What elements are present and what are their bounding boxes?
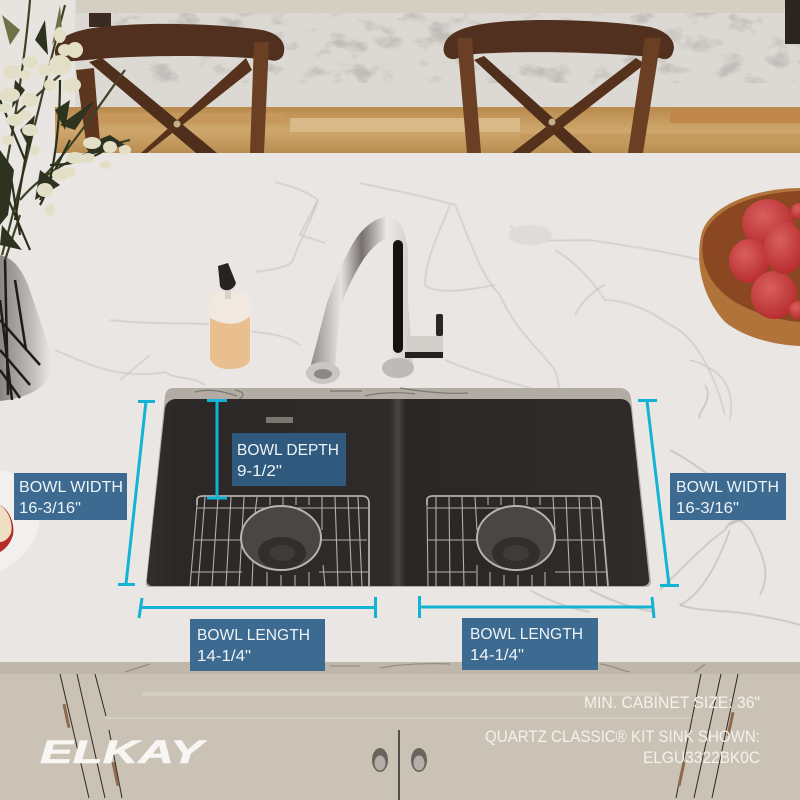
left strainer — [241, 506, 321, 570]
overflow slot — [266, 417, 293, 423]
plant flowers — [0, 27, 131, 216]
bench legs — [89, 0, 800, 44]
faucet — [306, 217, 443, 384]
plate with apple — [0, 470, 40, 572]
chair left — [55, 24, 284, 153]
label: bowl depth: 9-1/2" — [237, 463, 282, 480]
rim veining — [195, 388, 468, 399]
label: left bowl length — [190, 619, 325, 671]
sink — [146, 388, 651, 587]
cabinet drawer panel — [105, 694, 695, 718]
plant leaves — [0, 5, 125, 250]
knob right — [411, 748, 427, 772]
marble grey blotch — [508, 225, 552, 245]
right grate — [427, 496, 608, 586]
dimension: bowl depth — [207, 400, 227, 498]
label: right bowl length: 14-1/4" — [470, 647, 524, 664]
dimension: right bowl width — [638, 400, 679, 586]
dimension: left bowl width — [118, 401, 155, 584]
text: minimum cabinet size: MIN. CABINET SIZE: 36" — [584, 693, 760, 712]
knob left — [372, 748, 388, 772]
fruit bowl — [699, 188, 800, 346]
background: rug — [0, 0, 800, 108]
label: right bowl width — [670, 473, 786, 520]
label: left bowl width — [14, 473, 127, 520]
dimension: left bowl length — [139, 597, 376, 618]
label: bowl depth — [232, 433, 346, 486]
text: kit sink shown: QUARTZ CLASSIC® KIT SINK SHOWN: — [485, 727, 760, 746]
label: bowl depth: BOWL DEPTH — [237, 442, 339, 459]
wood floor — [55, 107, 800, 154]
countertop — [0, 153, 800, 663]
text: model number: ELGU3322BK0C — [643, 748, 760, 767]
soap dispenser — [209, 263, 251, 369]
vase — [0, 255, 52, 401]
apples — [729, 199, 800, 319]
plant — [0, 0, 131, 260]
bench — [76, 0, 786, 13]
label: left bowl width: BOWL WIDTH — [19, 479, 123, 496]
marble veins lower right — [530, 385, 800, 625]
label: left bowl length: 14-1/4" — [197, 648, 251, 665]
marble veins — [55, 182, 731, 420]
logo: Elkay: ELKAY — [40, 734, 207, 770]
label: right bowl length: BOWL LENGTH — [470, 626, 583, 643]
door frame lines — [60, 674, 738, 800]
sink rim — [146, 388, 651, 587]
sink basin — [147, 399, 649, 586]
label: right bowl width: 16-3/16" — [676, 500, 739, 517]
label: right bowl width: BOWL WIDTH — [676, 479, 779, 496]
hinges — [63, 704, 734, 786]
rug mottled pattern — [110, 13, 800, 83]
label: left bowl width: 16-3/16" — [19, 500, 81, 517]
label: right bowl length — [462, 618, 598, 670]
cabinet — [0, 674, 800, 800]
dimension: right bowl length — [420, 596, 654, 618]
counter front edge — [0, 662, 800, 674]
chair right — [444, 20, 674, 153]
edge veining — [125, 664, 705, 672]
left grate — [190, 496, 369, 586]
rug left light area — [0, 0, 75, 108]
right strainer — [477, 506, 555, 570]
label: left bowl length: BOWL LENGTH — [197, 627, 310, 644]
